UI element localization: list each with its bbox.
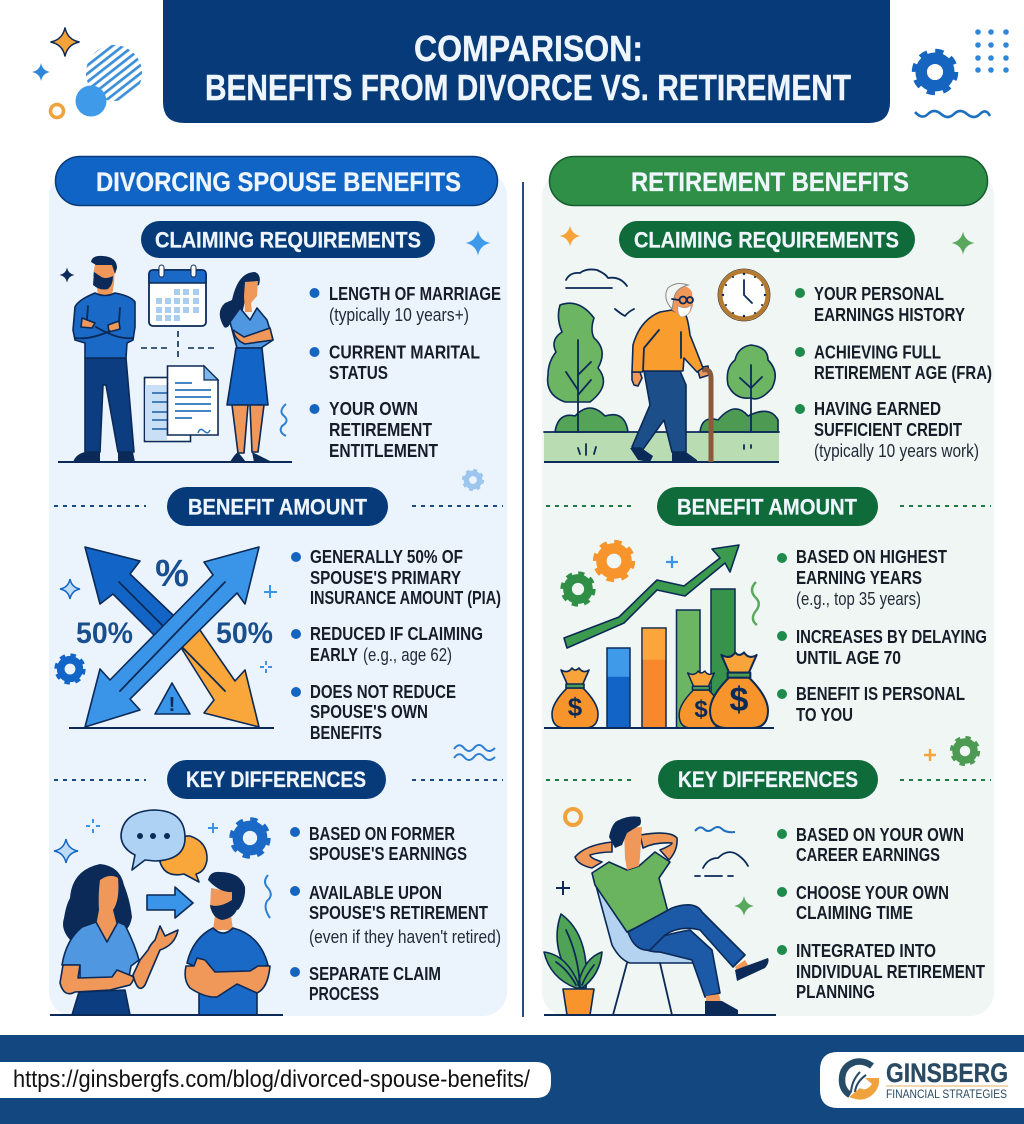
- icon: waves: [454, 745, 495, 760]
- panel heading: [550, 156, 988, 206]
- panel: retirement benefits: [542, 156, 994, 1016]
- icon: green gear: [952, 738, 978, 764]
- dashed rule: [54, 779, 503, 781]
- requirement list: STATUS: [329, 363, 388, 383]
- key differences list: INTEGRATED INTO: [796, 941, 936, 961]
- subheading: key differences: KEY DIFFERENCES: [186, 767, 366, 792]
- panel: divorcing spouse benefits: [49, 156, 507, 1016]
- icon: orange sparkle: [560, 226, 580, 246]
- requirement list: RETIREMENT: [329, 420, 432, 440]
- benefit amount list: EARNING YEARS: [796, 568, 922, 588]
- center divider: [522, 182, 524, 1017]
- key differences list: BASED ON YOUR OWN: [796, 825, 964, 845]
- benefit amount list: DOES NOT REDUCE: [310, 682, 456, 702]
- illustration: rising bars, trend arrow and money bags: $: [730, 681, 749, 719]
- dashed rule: [546, 505, 991, 507]
- key differences list: SPOUSE'S RETIREMENT: [309, 903, 488, 923]
- requirement list: EARNINGS HISTORY: [814, 305, 965, 325]
- subheading: benefit amount: BENEFIT AMOUNT: [188, 494, 368, 520]
- icon: green sparkle: [952, 232, 974, 254]
- benefit amount list: [291, 547, 501, 743]
- subheading: benefit amount: BENEFIT AMOUNT: [677, 494, 858, 520]
- illustration: rising bars, trend arrow and money bags: $: [694, 696, 708, 723]
- panel heading: DIVORCING SPOUSE BENEFITS: [96, 167, 461, 197]
- illustration: crossing arrows with 50% labels: %: [155, 553, 189, 595]
- illustration: crossing arrows with 50% labels: !: [169, 694, 175, 716]
- illustration: rising bars, trend arrow and money bags: [544, 543, 774, 728]
- requirement list: ENTITLEMENT: [329, 441, 438, 461]
- benefit amount list: UNTIL AGE 70: [796, 648, 901, 668]
- logo: Ginsberg Financial Strategies: [820, 1052, 1024, 1108]
- requirement list: YOUR OWN: [329, 399, 418, 419]
- subheading: claiming requirements: [141, 221, 435, 258]
- requirement list: ACHIEVING FULL: [814, 342, 941, 362]
- panel heading: RETIREMENT BENEFITS: [631, 167, 909, 197]
- benefit amount list: REDUCED IF CLAIMING: [310, 624, 483, 644]
- key differences list: INDIVIDUAL RETIREMENT: [796, 962, 985, 982]
- icon: faded gear: [464, 471, 482, 489]
- subheading: benefit amount: [167, 487, 388, 526]
- key differences list: PROCESS: [309, 984, 379, 1004]
- requirement list: CURRENT MARITAL: [329, 342, 480, 362]
- subheading: key differences: [658, 760, 878, 799]
- requirement list: LENGTH OF MARRIAGE: [329, 284, 501, 304]
- illustration: crossing arrows with 50% labels: 50%: [76, 617, 133, 650]
- benefit amount list: INSURANCE AMOUNT (PIA): [310, 588, 501, 608]
- dashed rule: [54, 505, 503, 507]
- key differences list: AVAILABLE UPON: [309, 883, 442, 903]
- footer band: [0, 1035, 1024, 1124]
- benefit amount list: BENEFIT IS PERSONAL: [796, 684, 965, 704]
- requirement list: RETIREMENT AGE (FRA): [814, 363, 992, 383]
- subheading: key differences: KEY DIFFERENCES: [678, 767, 858, 792]
- benefit amount list: (e.g., top 35 years): [796, 589, 921, 609]
- key differences list: CLAIMING TIME: [796, 903, 913, 923]
- benefit amount list: SPOUSE'S OWN: [310, 702, 428, 722]
- subheading: claiming requirements: CLAIMING REQUIREMENTS: [634, 228, 899, 252]
- illustration: crossing arrows with 50% labels: [57, 547, 277, 728]
- illustration: crossing arrows with 50% labels: 50%: [216, 617, 273, 650]
- title line 1: COMPARISON:: [414, 28, 643, 69]
- requirement list: YOUR PERSONAL: [814, 284, 944, 304]
- requirement list: (typically 10 years+): [329, 305, 469, 325]
- requirement list: (typically 10 years work): [814, 441, 979, 461]
- key differences list: CAREER EARNINGS: [796, 845, 940, 865]
- benefit amount list: GENERALLY 50% OF: [310, 547, 463, 567]
- benefit amount list: EARLY: [310, 645, 358, 665]
- key differences list: [290, 824, 501, 1004]
- benefit amount list: TO YOU: [796, 705, 853, 725]
- key differences list: [777, 825, 985, 1002]
- key differences list: CHOOSE YOUR OWN: [796, 883, 949, 903]
- illustration: retiree walking with cane: [544, 269, 779, 462]
- decoration: top left shapes: [32, 28, 142, 118]
- benefit amount list: BASED ON HIGHEST: [796, 547, 947, 567]
- illustration: relaxed retiree in chair with plant: [544, 809, 776, 1015]
- panel heading: [56, 156, 498, 206]
- requirement list: [795, 284, 992, 461]
- illustration: rising bars, trend arrow and money bags: $: [568, 692, 583, 722]
- title banner: [163, 0, 890, 123]
- benefit amount list: INCREASES BY DELAYING: [796, 627, 987, 647]
- requirement list: [310, 284, 501, 461]
- key differences list: SPOUSE'S EARNINGS: [309, 844, 467, 864]
- key differences list: SEPARATE CLAIM: [309, 964, 441, 984]
- illustration: couple talking: [50, 810, 283, 1015]
- subheading: claiming requirements: CLAIMING REQUIREMENTS: [155, 228, 421, 252]
- benefit amount list: SPOUSE'S PRIMARY: [310, 568, 461, 588]
- key differences list: PLANNING: [796, 982, 875, 1002]
- icon: squiggle: [281, 404, 287, 436]
- subheading: claiming requirements: [619, 221, 915, 258]
- logo: Ginsberg Financial Strategies: FINANCIAL STRATEGIES: [886, 1089, 1007, 1101]
- key differences list: BASED ON FORMER: [309, 824, 455, 844]
- icon: orange plus: [924, 749, 936, 761]
- requirement list: HAVING EARNED: [814, 399, 941, 419]
- benefit amount list: BENEFITS: [310, 723, 382, 743]
- illustration: divorcing couple with calendar and documents: [58, 256, 292, 462]
- subheading: benefit amount: [657, 487, 878, 526]
- subheading: key differences: [167, 760, 386, 799]
- icon: sparkle: [466, 230, 490, 256]
- dashed rule: [546, 779, 991, 781]
- benefit amount list: [777, 547, 987, 725]
- requirement list: SUFFICIENT CREDIT: [814, 420, 962, 440]
- url pill: https://ginsbergfs.com/blog/divorced-spouse-benefits/: [13, 1066, 530, 1093]
- title line 2: BENEFITS FROM DIVORCE VS. RETIREMENT: [205, 67, 851, 108]
- benefit amount list: (e.g., age 62): [363, 645, 452, 665]
- decoration: top right gear, dots, wave: [915, 29, 1009, 117]
- key differences list: (even if they haven't retired): [309, 927, 501, 947]
